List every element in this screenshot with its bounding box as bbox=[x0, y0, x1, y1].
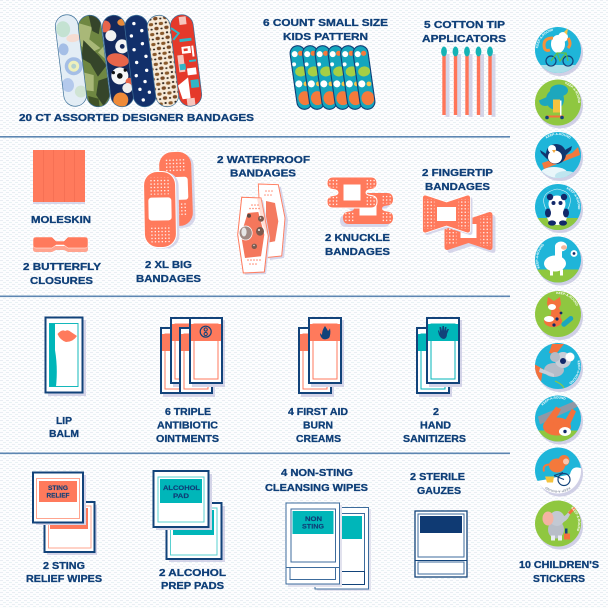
sticker: monkey on bike bbox=[535, 448, 583, 496]
label: gauzes bbox=[410, 472, 465, 497]
panel: butterfly closures bbox=[23, 237, 101, 287]
fingertip bandage: back bbox=[444, 212, 496, 253]
label: ointments: 6 TRIPLE bbox=[165, 407, 211, 418]
label: sanitizers: HAND bbox=[420, 420, 451, 432]
sticker: sloth bbox=[535, 396, 583, 444]
sticker: koala bbox=[535, 343, 583, 392]
panel: waterproof bandages bbox=[217, 155, 310, 275]
knuckle bandage: front bbox=[327, 177, 377, 208]
waterproof bandage: back bbox=[258, 184, 288, 260]
sticker: elephant bbox=[535, 500, 583, 550]
fingertip bandage: front bbox=[422, 195, 472, 235]
sticker: unicorn bbox=[535, 27, 583, 76]
label: waterproof: BANDAGES bbox=[230, 168, 296, 180]
label: ointments bbox=[156, 407, 219, 445]
section dividers bbox=[0, 136, 510, 454]
sticker: panda bbox=[535, 184, 583, 233]
label: fingertip: 2 FINGERTIP bbox=[422, 168, 493, 179]
label: XL bandages: BANDAGES bbox=[136, 274, 201, 285]
knuckle bandage: back bbox=[340, 193, 393, 227]
wipe: back bbox=[315, 508, 371, 591]
butterfly closure icon bbox=[33, 237, 88, 252]
label: waterproof bbox=[217, 155, 310, 180]
sticker: monkey on bike: KEEP-A-ROUND bbox=[545, 487, 570, 493]
label: gauzes: 2 STERILE bbox=[410, 472, 465, 483]
sticker: penguin: KEEP-A-ROUND bbox=[546, 132, 571, 138]
label: knuckle: 2 KNUCKLE bbox=[325, 233, 390, 244]
sting wipe: front bbox=[33, 472, 86, 525]
burn cream packets bbox=[299, 318, 344, 397]
bandage: polka dots bbox=[123, 14, 158, 108]
sticker: elephant: KEEP-A-ROUND bbox=[571, 506, 580, 532]
water droplets bbox=[239, 214, 264, 249]
label: sting relief: RELIEF WIPES bbox=[26, 574, 102, 585]
panel: alcohol prep pads bbox=[154, 471, 226, 592]
label: children's stickers: 10 CHILDREN'S bbox=[519, 560, 599, 571]
panel: knuckle bandages bbox=[325, 177, 393, 258]
panel: XL big bandages bbox=[136, 151, 201, 285]
label: ointments: OINTMENTS bbox=[156, 434, 219, 445]
panel: hand sanitizers bbox=[403, 318, 466, 445]
kids bandages group bbox=[289, 45, 376, 110]
panel: sting relief wipes bbox=[26, 472, 102, 585]
panel: lip balm bbox=[46, 318, 86, 440]
moleskin sheet bbox=[33, 150, 85, 204]
sanitizer packets bbox=[417, 318, 462, 397]
panel: sterile gauzes bbox=[410, 472, 467, 577]
bandage: tie-dye bbox=[53, 13, 89, 108]
ointment packets bbox=[161, 318, 225, 397]
panel: assorted designer bandages bbox=[19, 12, 254, 124]
label: burn creams: CREAMS bbox=[296, 434, 341, 445]
label: sting relief bbox=[26, 561, 102, 585]
label: kids pattern: KIDS PATTERN bbox=[283, 32, 368, 43]
label: applicators bbox=[422, 20, 506, 45]
label: butterfly closures: 2 BUTTERFLY bbox=[23, 262, 101, 273]
sting wipe: front: STING bbox=[48, 485, 68, 492]
XL bandage: front bbox=[143, 171, 180, 249]
label: gauzes: GAUZES bbox=[417, 486, 461, 497]
alcohol pad: front: PAD bbox=[173, 493, 189, 500]
label: lip balm bbox=[49, 416, 79, 440]
sting wipe: back bbox=[44, 502, 97, 555]
label: kids pattern bbox=[263, 18, 388, 43]
wipe: front: STING bbox=[302, 524, 324, 530]
lip balm packet bbox=[46, 318, 86, 396]
panel: cotton tip applicators bbox=[422, 20, 506, 117]
sticker: dinosaur bbox=[535, 80, 583, 128]
icon: flame bbox=[320, 326, 330, 339]
panel: children's stickers bbox=[519, 27, 599, 585]
XL bandage: back bbox=[159, 151, 196, 229]
label: knuckle bbox=[325, 233, 390, 258]
label: burn creams bbox=[288, 407, 348, 445]
label: sanitizers bbox=[403, 407, 466, 445]
label: kids pattern: 6 COUNT SMALL SIZE bbox=[263, 18, 388, 29]
sticker: unicorn: KEEP-A-ROUND bbox=[536, 28, 553, 48]
label: sting relief: 2 STING bbox=[43, 561, 85, 572]
panel: moleskin bbox=[31, 150, 91, 226]
label: alcohol pads: PREP PADS bbox=[161, 581, 224, 592]
panel: fingertip bandages bbox=[422, 168, 496, 253]
label: children's stickers: STICKERS bbox=[533, 574, 585, 585]
label: cleansing wipes bbox=[265, 468, 368, 494]
label: alcohol pads bbox=[159, 568, 226, 592]
panel: first aid burn creams bbox=[288, 318, 348, 445]
label: alcohol pads: 2 ALCOHOL bbox=[159, 568, 226, 579]
icon: lips bbox=[58, 330, 77, 342]
label: cleansing wipes: CLEANSING WIPES bbox=[265, 483, 368, 494]
bandage: camouflage bbox=[78, 14, 110, 108]
icon: hand bbox=[438, 326, 449, 339]
label: fingertip: BANDAGES bbox=[425, 182, 490, 193]
label: applicators: 5 COTTON TIP bbox=[424, 20, 505, 31]
sticker: llama: KEEP-A-ROUND bbox=[536, 244, 544, 269]
alcohol pad: back bbox=[166, 503, 225, 562]
panel: non-sting cleansing wipes bbox=[265, 468, 371, 591]
label: XL bandages: 2 XL BIG bbox=[145, 260, 192, 271]
label: applicators: APPLICATORS bbox=[422, 34, 506, 45]
sticker: fox: KEEP-A-ROUND bbox=[556, 292, 578, 306]
waterproof bandage: front bbox=[238, 197, 270, 275]
label: lip balm: BALM bbox=[49, 429, 79, 440]
alcohol pad: front: ALCOHOL bbox=[163, 485, 200, 492]
label: cleansing wipes: 4 NON-STING bbox=[281, 468, 353, 479]
sticker: koala: KEEP-A-ROUND bbox=[570, 360, 580, 384]
label: butterfly closures bbox=[23, 262, 101, 287]
wipe: front bbox=[286, 503, 342, 587]
applicator sticks bbox=[441, 46, 496, 117]
label: sanitizers: SANITIZERS bbox=[403, 434, 466, 445]
panel: kids pattern bandages bbox=[263, 18, 388, 110]
sticker: fox bbox=[535, 291, 583, 340]
bandage: red pattern bbox=[169, 13, 203, 108]
label: XL bandages bbox=[136, 260, 201, 285]
label: lip balm: LIP bbox=[56, 416, 72, 427]
label: knuckle: BANDAGES bbox=[325, 247, 390, 258]
wipe: front: NON bbox=[305, 516, 322, 523]
sting wipe: front: RELIEF bbox=[46, 492, 70, 500]
label: ointments: ANTIBIOTIC bbox=[157, 420, 218, 432]
sticker: panda: KEEP-A-ROUND bbox=[566, 187, 580, 210]
bandage: sports balls bbox=[102, 14, 134, 108]
sticker: llama bbox=[535, 236, 583, 286]
panel: triple antibiotic ointments bbox=[156, 318, 225, 445]
label: butterfly closures: CLOSURES bbox=[30, 276, 93, 287]
label: sanitizers: 2 bbox=[433, 407, 439, 418]
label: children's stickers bbox=[519, 560, 599, 585]
label: burn creams: BURN bbox=[303, 420, 333, 432]
label: moleskin: MOLESKIN bbox=[31, 215, 91, 226]
sticker: sloth: KEEP-A-ROUND bbox=[541, 396, 566, 406]
bandage: leopard bbox=[146, 14, 180, 108]
label: burn creams: 4 FIRST AID bbox=[288, 407, 348, 418]
gauze packet bbox=[415, 511, 467, 577]
sticker: dinosaur: KEEP-A-ROUND bbox=[565, 82, 580, 103]
label: fingertip bbox=[422, 168, 493, 193]
label: waterproof: 2 WATERPROOF bbox=[217, 155, 310, 166]
alcohol pad: front bbox=[154, 471, 212, 530]
icon: ointment symbol bbox=[200, 326, 211, 337]
sticker: penguin bbox=[535, 132, 583, 181]
label: assorted bandages: 20 CT ASSORTED DESIGNER BANDAGES bbox=[19, 113, 254, 124]
